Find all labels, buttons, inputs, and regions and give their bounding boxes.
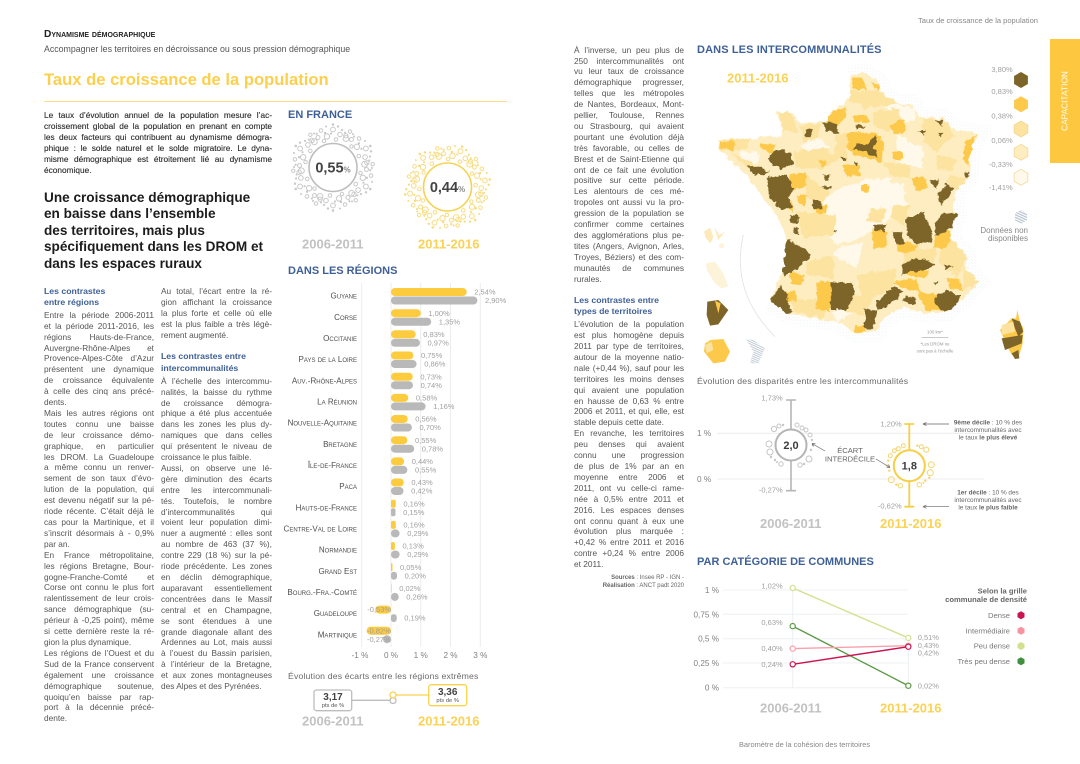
text column: intercommunalities: se sont étendues à une — [161, 616, 272, 626]
bar chart: regions: Occitanie — [323, 334, 357, 343]
text column: regions: démographique soutenue, — [44, 681, 154, 691]
text column: regions continued: la plus forte et celle où elle — [161, 308, 272, 318]
density legend: communale de densité — [945, 595, 1027, 604]
line chart: commune categories — [694, 582, 939, 693]
bar chart: regions: Corse — [334, 313, 357, 322]
whisker 2006-2011: -0,27% — [759, 486, 783, 494]
gap indicator — [314, 685, 467, 711]
whisker 2006-2011: 1,73% — [761, 394, 783, 402]
line chart: commune categories: 0,75 % — [694, 610, 719, 619]
year labels gap: 2011-2016 — [418, 714, 479, 728]
text column: intercommunalities: à l’ouest du Bassin parisien, — [161, 648, 272, 658]
whisker 2011-2016 — [878, 420, 934, 510]
text column: regions: gogne-Franche-Comté et — [44, 572, 154, 582]
text column: regions continued: gion affichant la croissance — [161, 297, 272, 307]
year labels France: 2006-2011 — [302, 236, 363, 252]
text column: regions: régions Hauts-de-France, — [44, 332, 154, 342]
sources: Réalisation : ANCT padt 2020 — [603, 583, 684, 589]
line chart: commune categories: 0,63% — [761, 618, 783, 627]
whisker 2011-2016: 1,20% — [880, 420, 902, 428]
text column: territory types: moyenne entre 2006 et — [574, 472, 684, 482]
map legend: 3,80% — [991, 65, 1013, 74]
bar chart: regions: 0,20% — [405, 571, 426, 580]
text column: right page intro: munautés de communes — [574, 263, 684, 273]
text column: territory types: stable depuis cette date. — [574, 417, 664, 427]
bar chart: regions: 0,16% — [403, 520, 425, 530]
text column: regions: toutes connu une baisse — [44, 419, 154, 429]
text column: intercommunalities: en déclin démographique, — [161, 572, 272, 582]
text column: regions: si cette dernière reste la ré- — [44, 626, 154, 636]
intro text: les deux facteurs qui contribuent au dynamisme démogra- — [44, 132, 272, 142]
text column: intercommunalities: gère diminution des écarts — [161, 474, 272, 484]
text column: regions: ralentissement de leur crois- — [44, 593, 154, 603]
text column: regions: les régions Bretagne, Bour- — [44, 561, 154, 571]
subtitle: gap between extreme regions: Évolution des écarts entre les régions extrêmes — [288, 671, 479, 681]
text column: intercommunalities: qui présentent le niveau de — [161, 441, 272, 451]
text column: territory types: connu une progression — [574, 450, 684, 460]
text column: regions: est devenu négatif sur la pé- — [44, 495, 154, 505]
text column: regions: Entre la période 2006-2011 — [44, 310, 154, 320]
map: France intercommunalities — [704, 68, 1023, 363]
bar chart: regions: 0,55% — [415, 466, 437, 474]
text column: regions: gion la plus dynamique. — [44, 637, 131, 647]
bar chart: regions: 1,00% — [428, 309, 450, 318]
scale note: *Les DROM ne — [920, 342, 950, 347]
bar chart: regions: 0 % — [384, 651, 398, 660]
bar chart: regions: 0,58% — [416, 394, 437, 402]
bar chart: regions: 0,42% — [411, 487, 433, 496]
text column: regions continued: rement augmenté. — [161, 330, 228, 340]
whisker 2011-2016: 1,8 — [902, 461, 917, 473]
text column: intercommunalities: et aux zones montagneuses — [161, 670, 272, 680]
title rule — [44, 101, 507, 102]
bar chart: regions: Hauts-de-France — [296, 503, 357, 512]
intro text: misme démographique est étroitement lié au dynamisme — [44, 154, 272, 164]
title: Taux de croissance de la population — [44, 70, 329, 89]
text column: territory types: ont connu quant à eux une — [574, 516, 684, 526]
text column: right page intro: rurales. — [574, 274, 602, 284]
heading: dans les régions: DANS LES RÉGIONS — [288, 264, 397, 277]
text column: regions: et la période 2011-2016, les — [44, 321, 154, 331]
whisker 2011-2016: -0,62% — [878, 502, 902, 510]
gap indicator: pts de % — [322, 703, 344, 709]
map legend: disponibles — [988, 234, 1028, 243]
main heading: dans les espaces ruraux — [44, 256, 202, 271]
text column: regions: présentent une dynamique — [44, 364, 154, 374]
bar chart: regions: 0,55% — [415, 436, 437, 445]
bar chart: regions: Auv.-Rhône-Alpes — [292, 376, 357, 385]
intro text: Le taux d’évolution annuel de la population mesure l’ac- — [44, 110, 272, 120]
bar chart: regions: 0,78% — [422, 444, 443, 453]
bar chart: regions: 0,29% — [407, 550, 429, 559]
decile notes: le taux le plus élevé — [959, 434, 1018, 442]
decile chart: 0 % — [697, 475, 711, 484]
heading: contrasts between territory types — [574, 294, 659, 316]
year labels France: 2011-2016 — [418, 236, 479, 252]
bar chart: regions: -0,82% — [367, 626, 391, 635]
text column: territory types: contre +0,24 % entre 2006 — [574, 548, 684, 558]
bar chart: regions: Île-de-France — [307, 461, 357, 470]
text column: right page intro: démographique progresser, — [574, 77, 684, 87]
bar chart: regions: Grand Est — [318, 567, 357, 576]
text column: intercommunalities: Aussi, on observe une lé- — [161, 463, 272, 473]
text column: intercommunalities: de croissance démogra- — [161, 398, 272, 408]
donut: France 2006-2011: 0,55% — [315, 160, 351, 176]
text column: right page intro: ont de ce fait une évolution — [574, 165, 684, 175]
text column: regions: riode récente. C’était déjà le — [44, 506, 154, 516]
bar chart: regions: 0,16% — [403, 499, 425, 508]
bar chart: regions: 0,97% — [428, 338, 449, 347]
heading: contrasts between intercommunalities: Les contrastes entre — [161, 351, 246, 361]
bar chart: regions: Bretagne — [323, 440, 357, 449]
text column: regions: port à la décennie précé- — [44, 702, 154, 712]
main heading: Une croissance démographique — [44, 190, 250, 205]
text column: regions: quoiqu’en baisse par rap- — [44, 692, 154, 702]
scale note: sont pas à l’échelle — [917, 348, 954, 353]
Corsica — [1000, 310, 1023, 359]
bar chart: regions: 0,70% — [420, 423, 441, 432]
bar chart: regions: 0,75% — [421, 351, 443, 360]
subtitle: disparities: Évolution des disparités entre les intercommunalités — [697, 376, 909, 386]
text column: regions continued: Au total, l’écart entre la ré- — [161, 286, 272, 296]
text column: right page intro: très favorable, ou celles de — [574, 143, 684, 153]
text column: regions: sement de son taux d’évo- — [44, 473, 154, 483]
intro text — [44, 110, 272, 175]
map legend — [980, 65, 1028, 243]
decile notes: 1er décile : 10 % des — [957, 490, 1019, 496]
year labels deciles — [760, 516, 941, 531]
text column: intercommunalities: croissance le plus faible. — [161, 452, 251, 462]
interdecile label: ÉCART — [837, 446, 863, 455]
text column: right page intro: Brest et de Saint-Etienne qui — [574, 154, 684, 164]
line chart: commune categories: 0 % — [705, 684, 719, 693]
text column: territory types: est plus homogène depuis — [574, 330, 684, 340]
bar chart: regions: 0,02% — [399, 584, 421, 593]
map year: 2011-2016 — [727, 70, 788, 86]
bar chart: regions: Martinique — [318, 630, 357, 639]
bar chart: regions: 0,19% — [404, 614, 426, 623]
text column: regions: Provence-Alpes-Côte d’Azur — [44, 353, 154, 363]
section subtitle: Accompagner les territoires en décroissance ou sous pression démographique — [44, 44, 350, 54]
text column: right page intro: pellier, Toulouse, Rennes — [574, 110, 684, 120]
main heading — [44, 190, 263, 271]
text column: intercommunalities: auparavant essentiellement — [161, 583, 272, 593]
text column: right page intro: telles que les métropoles — [574, 88, 684, 98]
text column: territory types: 2011, ont vu celle-ci rame- — [574, 483, 684, 493]
text column: regions — [44, 310, 154, 723]
bar chart: regions: 0,86% — [424, 360, 446, 369]
line chart: commune categories: 0,5 % — [698, 635, 719, 644]
text column: regions continued — [161, 286, 272, 340]
bar chart: regions: Pays de la Loire — [299, 355, 357, 364]
text column: regions: Auvergne-Rhône-Alpes et — [44, 343, 154, 353]
text column: territory types: nale (+0,44 %), sauf pour les — [574, 363, 684, 373]
text column: right page intro: Les alentours de ces mé- — [574, 186, 684, 196]
gap indicator: pts de % — [436, 698, 459, 704]
bar chart: regions: Guadeloupe — [314, 609, 357, 618]
bar chart: regions: 0,43% — [411, 478, 433, 487]
text column: intercommunalities: À l’échelle des intercommu- — [161, 376, 272, 386]
heading: par catégorie: PAR CATÉGORIE DE COMMUNES — [697, 555, 874, 568]
scale note: 100 km* — [927, 329, 943, 334]
map legend: 0,06% — [991, 136, 1013, 145]
density legend: Peu dense — [974, 642, 1010, 651]
text column: regions: les DROM. La Guadeloupe — [44, 452, 154, 462]
text column: intercommunalities: nalités, la baisse du rythme — [161, 387, 272, 397]
text column: regions: lution de la population, qui — [44, 484, 154, 494]
bar chart: regions: 1,35% — [439, 317, 460, 326]
bar chart: regions: -1 % — [352, 651, 368, 660]
text column: regions: dente. — [44, 713, 67, 723]
bar chart: regions: 2 % — [443, 651, 458, 660]
line chart: commune categories: 0,24% — [761, 660, 783, 669]
whisker 2006-2011 — [759, 394, 814, 494]
text column: right page intro: positive sur cette période. — [574, 175, 684, 185]
density legend: Intermédiaire — [966, 626, 1010, 635]
decile notes: 9ème décile : 10 % des — [954, 420, 1022, 426]
map legend: 0,83% — [991, 87, 1013, 96]
text column: regions: En France métropolitaine, — [44, 550, 154, 560]
text column: intercommunalities: grande diagonale allant des — [161, 627, 272, 637]
bar chart: regions: 1,16% — [433, 402, 455, 411]
text column: regions: Les régions de l’Ouest et du — [44, 648, 154, 658]
intro text: croissement global de la population en prenant en compte — [44, 121, 272, 131]
text column: intercommunalities: riode précédente. Les zones — [161, 561, 272, 571]
text column: intercommunalities: nuer a augmenté : elles sont — [161, 528, 272, 538]
text column: intercommunalities: Ardennes au Lot, mais aussi — [161, 637, 272, 647]
text column: regions: graphique, en particulier — [44, 441, 154, 451]
line chart: commune categories: 0,25 % — [694, 659, 719, 668]
text column: regions: par an. — [44, 539, 70, 549]
text column: right page intro: ou Strasbourg, qui avaient — [574, 121, 684, 131]
text column: right page intro: gression de la population se — [574, 208, 684, 218]
text column: regions: Mais les autres régions ont — [44, 408, 154, 418]
bar chart: regions: Bourg.-Fra.-Comté — [287, 588, 357, 597]
map legend: -0,33% — [989, 160, 1013, 169]
sources: Sources : Insee RP - IGN - — [611, 575, 684, 581]
bar chart: regions: 0,15% — [403, 508, 425, 517]
text column: regions continued: est la plus faible a très légè- — [161, 319, 272, 329]
heading: contrasts between regions: entre régions — [44, 297, 99, 307]
text column: territory types: 2011 par type de territoires, — [574, 341, 684, 351]
heading: contrasts between intercommunalities: intercommunalités — [161, 363, 238, 373]
text column: regions: de leur croissance démo- — [44, 430, 154, 440]
text column: territory types: peu denses qui avaient — [574, 439, 684, 449]
heading: en France: EN FRANCE — [288, 109, 352, 121]
DROM insets — [704, 227, 775, 363]
map legend: Données non — [980, 226, 1028, 235]
text column: right page intro: des agglomérations plus pe- — [574, 230, 684, 240]
bar chart: regions: 0,56% — [415, 415, 437, 424]
decile notes: intercommunalités avec — [954, 497, 1022, 504]
density legend: Dense — [988, 611, 1010, 620]
text column: regions: a même connu un renver- — [44, 462, 154, 472]
text column: territory types: En revanche, les territoires — [574, 428, 684, 438]
text column: territory types: de plus de 1% par an en — [574, 461, 684, 471]
text column: territory types: 2016. Les espaces denses — [574, 505, 684, 515]
text column: regions: sance démographique (su- — [44, 604, 154, 614]
bar chart: regions: 0,83% — [423, 330, 445, 339]
bar chart: regions: 0,74% — [421, 381, 442, 390]
map legend: -1,41% — [989, 183, 1013, 192]
year labels gap: 2006-2011 — [302, 714, 363, 728]
scale note — [917, 329, 954, 353]
text column: regions: dents. — [44, 397, 67, 407]
bar chart: regions: 0,13% — [402, 542, 424, 551]
interdecile label — [812, 444, 890, 468]
decile notes — [923, 420, 1022, 512]
line chart: commune categories: 0,43% — [918, 641, 939, 650]
main heading: des territoires, mais plus — [44, 223, 205, 238]
heading: contrasts between territory types: types de territoires — [574, 306, 652, 316]
running header: Taux de croissance de la population — [918, 16, 1038, 25]
text column: regions: Corse ont connu le plus fort — [44, 582, 154, 592]
whisker 2006-2011: 2,0 — [783, 440, 799, 452]
density legend — [945, 586, 1027, 666]
heading: contrasts between regions: Les contrastes — [44, 286, 105, 296]
side tab — [1050, 39, 1080, 163]
text column: intercommunalities: contre 229 (18 %) sur la pé- — [161, 550, 272, 560]
bar chart: regions: -0,27% — [367, 635, 391, 644]
text column: intercommunalities: à l’intérieur de la Bretagne, — [161, 659, 272, 669]
line chart: commune categories: 0,02% — [918, 682, 939, 690]
text column: right page intro: de Nantes, Bordeaux, Mont- — [574, 99, 684, 109]
heading: intercommunalités: DANS LES INTERCOMMUNALITÉS — [697, 43, 882, 56]
text column: regions: également une croissance — [44, 670, 154, 680]
footer: Baromètre de la cohésion des territoires — [739, 740, 870, 749]
text column: regions: à celle des cinq ans précé- — [44, 386, 154, 396]
line chart: commune categories: 0,42% — [918, 648, 939, 658]
year labels line chart — [760, 700, 941, 716]
bar chart: regions — [284, 283, 507, 660]
side tab: CAPACITATION — [1060, 71, 1070, 131]
text column: intercommunalities: phique a été plus accentuée — [161, 408, 272, 418]
text column: intercommunalities: voient leur population dimi- — [161, 517, 272, 527]
line chart: commune categories: 1,02% — [761, 582, 783, 590]
bar chart: regions: Guyane — [330, 292, 357, 301]
gap indicator: 3,36 — [438, 687, 458, 698]
decile notes: intercommunalités avec — [954, 427, 1022, 434]
year labels France — [302, 236, 479, 252]
bar chart: regions: Nouvelle-Aquitaine — [288, 419, 357, 428]
decile chart — [697, 394, 1022, 531]
text column: regions: s’inscrit désormais à - 0,9% — [44, 528, 154, 538]
text column: right page intro: vu leur taux de croissance — [574, 66, 684, 76]
text column: regions: cas pour la Martinique, et il — [44, 517, 154, 527]
text column: territory types: 2006 et 2011, et qui, elle, est — [574, 406, 684, 416]
year labels line chart: 2011-2016 — [880, 700, 941, 716]
density legend: Selon la grille — [978, 586, 1027, 596]
text column: intercommunalities: dans les zones les plus dy- — [161, 419, 272, 429]
text column: intercommunalities: namiques que dans celles — [161, 430, 272, 440]
text column: right page intro: tites (Angers, Avignon, Arles, — [574, 241, 684, 251]
bar chart: regions: Centre-Val de Loire — [284, 524, 357, 534]
text column: intercommunalities — [161, 376, 272, 691]
density legend: Très peu dense — [958, 657, 1010, 666]
bar chart: regions: 3 % — [473, 651, 487, 660]
text column: intercommunalities: au nombre de 463 (37 %), — [161, 539, 272, 549]
bar chart: regions: 0,29% — [407, 529, 429, 538]
text column: territory types: et 2011. — [574, 559, 603, 569]
main heading: spécifiquement dans les DROM et — [44, 239, 263, 254]
year labels deciles: 2011-2016 — [880, 516, 941, 531]
text column: regions: périeur à -0,25 point), même — [44, 615, 154, 625]
intro text: économique. — [44, 165, 92, 175]
text column: regions: Sud de la France conservent — [44, 659, 154, 669]
donut: France 2011-2016 — [385, 128, 510, 246]
bar chart: regions: 2,90% — [485, 296, 507, 305]
bar chart: regions: 1 % — [414, 651, 428, 660]
bar chart: regions: Normandie — [319, 546, 357, 555]
bar chart: regions: 0,44% — [412, 457, 433, 466]
line chart: commune categories: 0,40% — [761, 644, 783, 653]
donut: France 2011-2016: 0,44% — [430, 180, 465, 196]
bar chart: regions: 0,05% — [400, 563, 422, 572]
decile notes: le taux le plus faible — [958, 504, 1018, 512]
text column: intercommunalities: concentrées dans le Massif — [161, 594, 272, 604]
text column: right page intro: Troyes, Béziers) et des com- — [574, 252, 684, 262]
donut: France 2006-2011 — [283, 123, 383, 212]
heading: contrasts between regions — [44, 286, 105, 307]
text column: right page intro: 250 intercommunalités ont — [574, 56, 684, 66]
heading: contrasts between intercommunalities — [161, 351, 246, 373]
sources — [603, 574, 684, 589]
main heading: en baisse dans l’ensemble — [44, 206, 216, 221]
section kicker: Dynamisme démographique — [44, 29, 155, 40]
year labels deciles: 2006-2011 — [760, 516, 821, 531]
decile chart: 1 % — [697, 429, 711, 438]
text column: territory types: née à 0,5% entre 2011 et — [574, 494, 684, 504]
line chart: commune categories: 1 % — [705, 586, 719, 595]
text column: intercommunalities: tés. Toutefois, le nombre — [161, 496, 272, 506]
bar chart: regions: Paca — [339, 482, 357, 491]
intro text: phique : le solde naturel et le solde migratoire. Le dyna- — [44, 143, 272, 153]
text column: right page intro: tropoles ont aussi vu la pro- — [574, 197, 684, 207]
text column: intercommunalities: central et en Champagne, — [161, 605, 272, 615]
bar chart: regions: La Réunion — [317, 398, 357, 406]
text column: right page intro: pourtant une évolution déjà — [574, 132, 684, 142]
line chart: commune categories: 0,51% — [918, 633, 939, 642]
bar chart: regions: -0,53% — [367, 605, 391, 614]
text column: territory types: autour de la moyenne natio- — [574, 352, 684, 362]
map legend: 0,38% — [991, 112, 1013, 120]
text column: intercommunalities: entre les intercommunali- — [161, 485, 272, 495]
interdecile label: INTERDÉCILE — [825, 454, 875, 464]
text column: territory types: L’évolution de la population — [574, 319, 684, 329]
text column: right page intro: À l’inverse, un peu plus de — [574, 45, 684, 55]
text column: intercommunalities: d’intercommunalités qui — [161, 507, 272, 517]
text column: intercommunalities: des Alpes et des Pyrénées. — [161, 681, 262, 691]
bar chart: regions: 0,26% — [406, 592, 428, 602]
text column: territory types: territoires les moins denses — [574, 374, 684, 384]
text column: regions: de croissance équivalente — [44, 375, 154, 385]
text column: right page intro — [574, 45, 684, 284]
year labels gap — [302, 714, 479, 728]
gap indicator: 3,17 — [323, 692, 343, 703]
bar chart: regions: 0,73% — [420, 372, 442, 381]
text column: territory types — [574, 319, 684, 569]
text column: territory types: +0,42 % entre 2011 et 2016 — [574, 537, 684, 547]
year labels line chart: 2006-2011 — [760, 700, 821, 716]
text column: right page intro: confirmer comme certaines — [574, 219, 684, 229]
bar chart: regions: 2,54% — [474, 288, 496, 297]
text column: territory types: qui avaient une population — [574, 385, 684, 395]
text column: territory types: en hausse de 0,63 % entre — [574, 396, 684, 406]
heading: contrasts between territory types: Les contrastes entre — [574, 294, 659, 304]
text column: territory types: évolution plus marquée : — [574, 526, 684, 536]
